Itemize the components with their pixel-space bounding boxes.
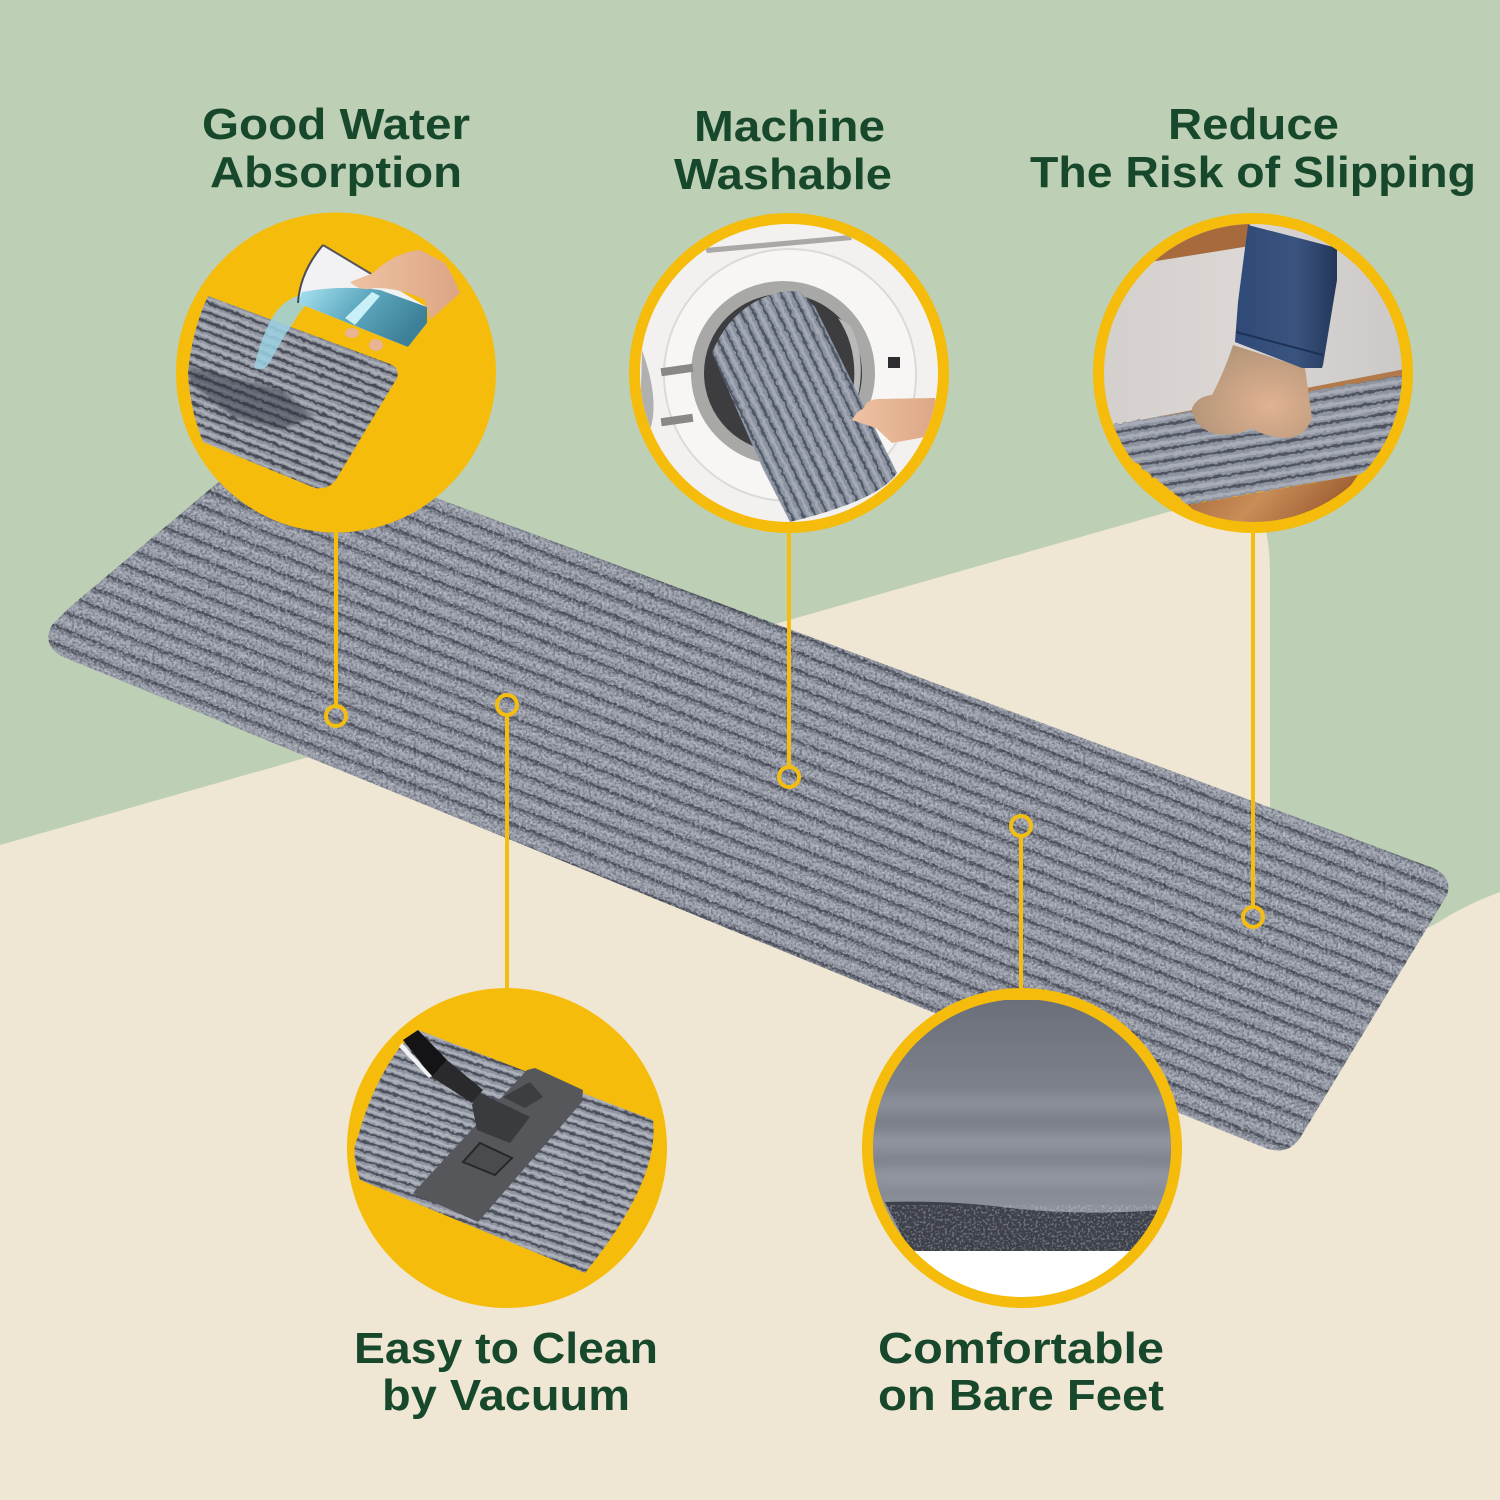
- heading: comfortable on bare feet: Comfortable: [878, 1324, 1164, 1373]
- water stream: [254, 292, 318, 369]
- callout line: machine washable: [779, 530, 799, 787]
- heading: good water absorption: Good Water: [202, 100, 470, 149]
- callout line: comfortable: [1011, 816, 1031, 990]
- blurred mat surface: [860, 1000, 1185, 1240]
- panel: water absorption circle: [176, 212, 496, 532]
- glass: [298, 245, 427, 347]
- heading: easy to clean by vacuum: Easy to Clean: [354, 1324, 658, 1373]
- vacuum nozzle: [399, 1030, 583, 1222]
- heading: comfortable on bare feet: [878, 1324, 1164, 1420]
- lower wood step: [1188, 475, 1358, 522]
- hand: [345, 250, 460, 351]
- mini mat: [188, 296, 398, 488]
- main stair mat: [48, 482, 1448, 1150]
- callout line: water absorption: [326, 530, 346, 726]
- jeans: [1235, 225, 1337, 368]
- heading: good water absorption: Absorption: [210, 148, 462, 197]
- fuzzy mat edge: [885, 1202, 1160, 1252]
- white surface: [914, 1251, 1130, 1297]
- heading: machine washable: Washable: [674, 150, 892, 199]
- background: cream floor: [0, 495, 1500, 1500]
- heading: machine washable: Machine: [694, 102, 885, 151]
- heading: reduce the risk of slipping: Reduce: [1168, 100, 1339, 149]
- foot: [1192, 345, 1312, 438]
- heading: machine washable: [674, 102, 892, 199]
- panel: reduce slipping circle: [1093, 213, 1413, 533]
- stair wall: [1100, 220, 1410, 430]
- callout line: easy to clean: [497, 695, 517, 990]
- panel: machine washable circle: [629, 213, 950, 535]
- heading: comfortable on bare feet: on Bare Feet: [878, 1371, 1164, 1420]
- stair tread mat: [1110, 374, 1410, 505]
- washing machine: [640, 224, 938, 522]
- heading: reduce the risk of slipping: [1030, 100, 1476, 197]
- mat being vacuumed: [354, 1030, 654, 1273]
- panel: comfortable circle: [860, 988, 1185, 1311]
- heading: easy to clean by vacuum: by Vacuum: [382, 1371, 630, 1420]
- heading: good water absorption: [202, 100, 470, 197]
- hand holding mat: [852, 398, 940, 443]
- panel: vacuum circle: [345, 988, 670, 1308]
- heading: easy to clean by vacuum: [354, 1324, 658, 1420]
- callout line: reduce slipping: [1243, 530, 1263, 927]
- upper wood step: [1154, 224, 1250, 262]
- mat going into drum: [712, 291, 897, 522]
- heading: reduce the risk of slipping: The Risk of Slipping: [1030, 148, 1476, 197]
